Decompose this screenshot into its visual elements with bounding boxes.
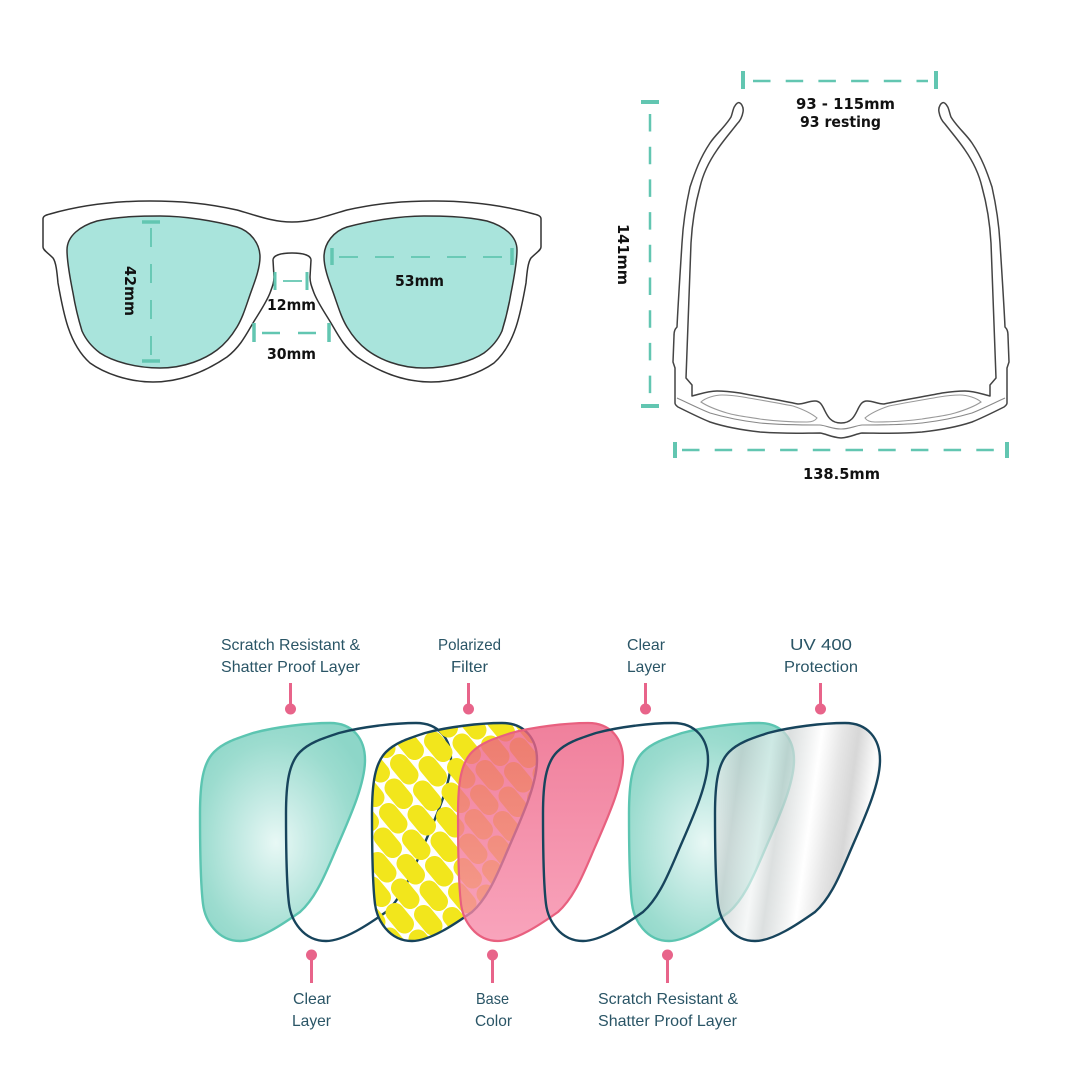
dimension: nose width 30mm: 30mm (267, 345, 316, 363)
dimension: bridge 12mm: 12mm (267, 296, 316, 314)
callout: base color (475, 950, 513, 1030)
callout: clear layer, top (627, 637, 667, 714)
callout: UV 400 protection (784, 637, 858, 714)
callout: polarized filter (438, 637, 501, 714)
callout: clear layer, top: Clear (627, 637, 666, 654)
callout: base color: Color (475, 1013, 513, 1030)
dimension: lens width 53mm: 53mm (395, 272, 444, 290)
dimension: bridge 12mm (267, 272, 316, 314)
callout: scratch resistant and shatter proof layer, bottom: Shatter Proof Layer (598, 1013, 738, 1030)
left temple and frame half (673, 103, 841, 438)
right temple and frame half (841, 103, 1009, 438)
layer: polarized filter, yellow pills (370, 722, 538, 942)
layer: UV 400 protection, silver (715, 723, 880, 941)
dimension: temple length 141mm: 141mm (614, 224, 632, 285)
dimension: lens width 53mm (332, 248, 512, 290)
layer: scratch resistant and shatter proof, teal (629, 723, 794, 941)
layer: clear, navy outline (543, 723, 708, 941)
dimension: temple opening 93-115mm (743, 71, 936, 131)
layer: base color, pink (458, 723, 623, 941)
callout: polarized filter: Filter (451, 659, 489, 676)
callout: clear layer, bottom: Layer (292, 1013, 332, 1030)
callout: UV 400 protection: Protection (784, 659, 858, 676)
callout: UV 400 protection: UV 400 (790, 637, 852, 654)
dimension: temple opening 93-115mm: 93 - 115mm (796, 95, 895, 113)
callout: clear layer, bottom (292, 950, 332, 1030)
lens layers diagram (198, 722, 882, 942)
callout: base color: Base (476, 991, 509, 1008)
callout: scratch resistant and shatter proof layer, bottom: Scratch Resistant & (598, 991, 738, 1008)
dimension: nose width 30mm (254, 323, 329, 363)
dimension: lens height 42mm (121, 222, 160, 361)
callout: polarized filter: Polarized (438, 637, 501, 654)
layer: scratch resistant and shatter proof, teal (200, 723, 365, 941)
frame outline (43, 201, 541, 382)
dimension: temple length 141mm (614, 102, 659, 406)
callout: clear layer, bottom: Clear (293, 991, 332, 1008)
left lens (67, 216, 260, 368)
dimension: frame width 138.5mm (675, 442, 1007, 483)
callout: scratch resistant and shatter proof layer, top: Scratch Resistant & (221, 637, 360, 654)
layer: clear, navy outline (286, 723, 451, 941)
right lens (324, 216, 517, 368)
dimension: frame width 138.5mm: 138.5mm (803, 465, 880, 483)
front view of sunglasses (43, 201, 541, 382)
callout: clear layer, top: Layer (627, 659, 667, 676)
callout: scratch resistant and shatter proof layer, bottom (598, 950, 738, 1030)
callout: scratch resistant and shatter proof layer, top: Shatter Proof Layer (221, 659, 361, 676)
dimension: lens height 42mm: 42mm (121, 266, 139, 316)
dimension: temple opening 93-115mm: 93 resting (800, 113, 881, 131)
callout: scratch resistant and shatter proof layer, top (221, 637, 361, 714)
top view of sunglasses (614, 71, 1009, 483)
